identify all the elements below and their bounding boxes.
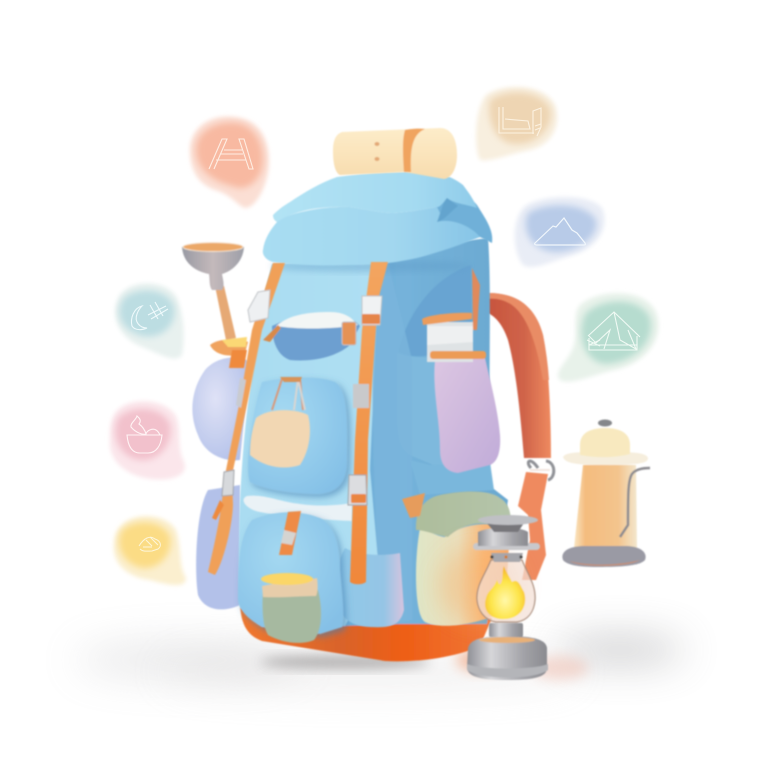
hood lid [263,172,492,265]
ground shadow [75,636,685,688]
backpack body [239,238,508,661]
white band [244,496,352,521]
upper fold [273,172,477,222]
right orange strap [348,262,388,584]
shoulder strap buckle ring [528,461,554,480]
dark right body [300,238,508,626]
green right pocket [402,492,511,626]
lower center pocket [336,548,404,627]
bubble: tent icon [558,293,659,382]
shoulder strap [485,293,551,580]
flame [485,566,525,619]
glow [438,547,518,623]
upper left buckle [248,290,270,322]
left side bag lower [196,485,240,609]
plunger cup item [182,242,248,368]
kettle [562,420,650,567]
lantern [438,515,548,680]
purple sleeping bag [422,268,500,473]
lantern cap [473,515,540,562]
glass globe [477,560,535,622]
top front pocket [263,312,360,360]
left side bag upper [192,357,250,460]
bubble: bed icon [476,87,557,160]
bubble: yellow herb icon [114,516,186,585]
lobe behind [430,192,492,250]
lower left pocket [238,512,343,634]
side arch panel [398,265,472,356]
hanging tan pouch [250,377,310,468]
bubble: ladder icon [190,117,269,208]
upper buckle [362,296,382,325]
green hanging pouch [261,573,321,643]
sleeping roll [333,128,457,179]
light left body [239,258,380,626]
lantern base [467,623,548,680]
lower roll [263,207,480,265]
center shading [372,262,412,625]
small strap with buckle [279,511,301,555]
bubble: food bowl icon [110,401,185,479]
lower buckle [348,475,367,505]
lower left buckle [222,470,234,496]
lid under-shadow [270,260,470,272]
middle front pocket [248,378,347,494]
bubble: mountain icon [515,197,605,267]
orange base [240,596,492,661]
lower right panel [410,460,494,495]
left orange strap [208,263,285,575]
bubble: moon and cross icon [115,283,184,359]
